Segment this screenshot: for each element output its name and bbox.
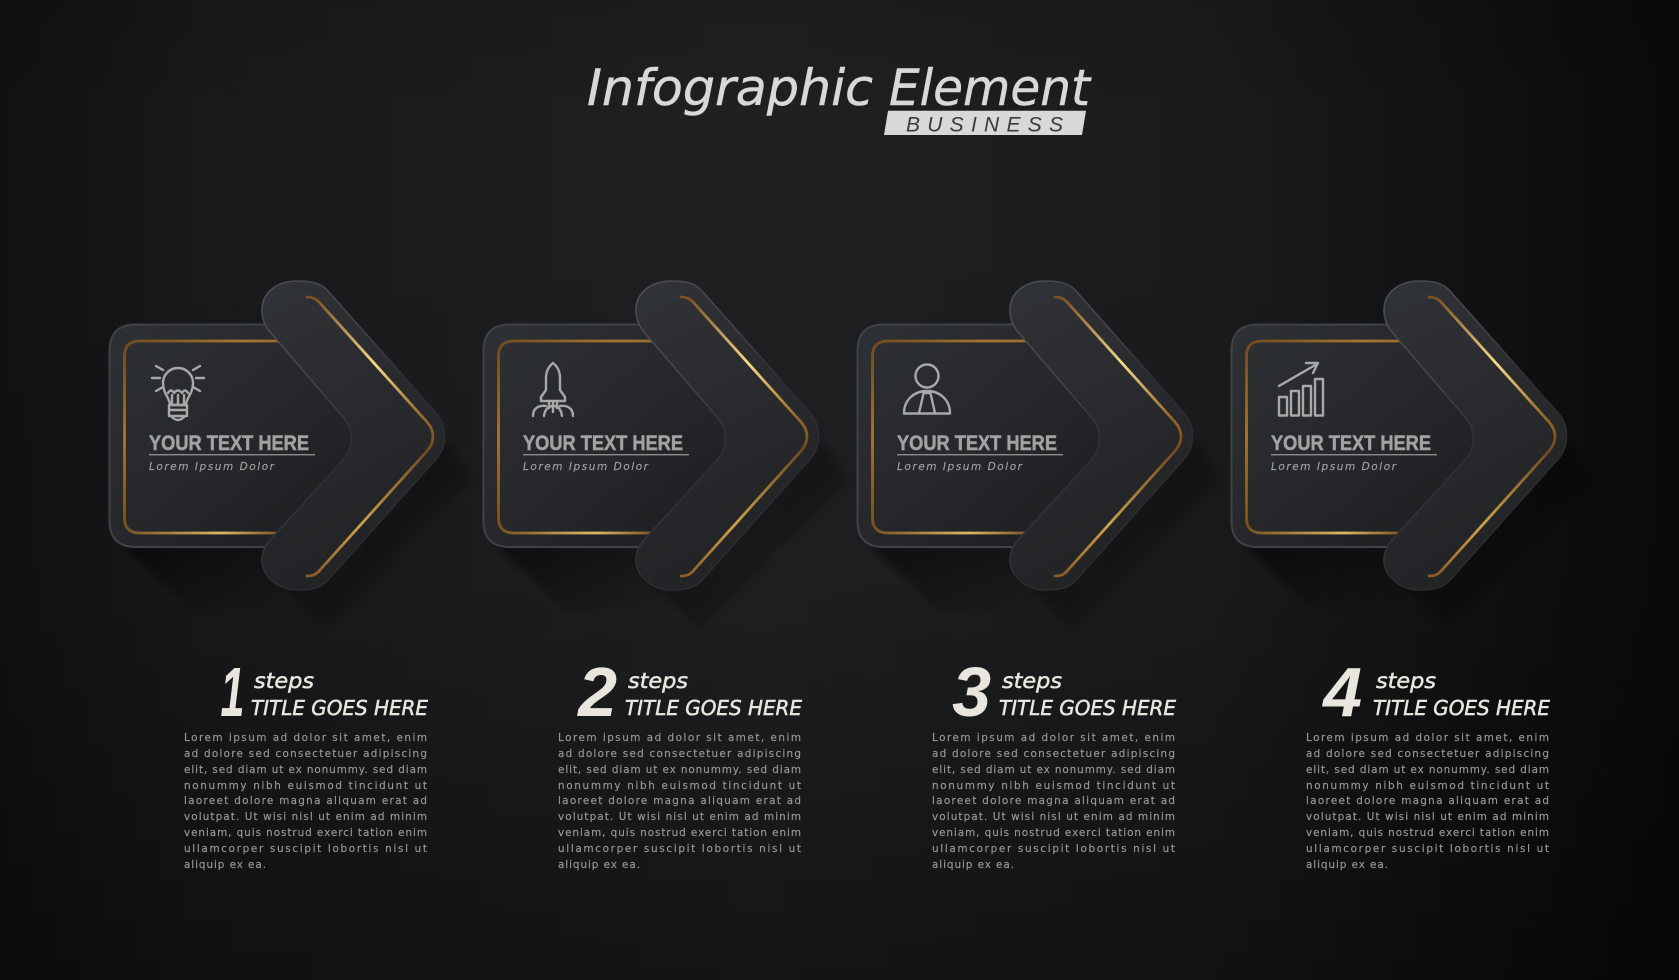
body text: Lorem ipsum ad dolor sit amet, enim: [184, 732, 427, 744]
body text: volutpat. Ut wisi nisl ut enim ad minim: [932, 811, 1175, 823]
body text: nonummy nibh euismod tincidunt ut: [932, 780, 1175, 792]
icon: light bulb: [152, 366, 204, 420]
label subtitle: Lorem Ipsum Dolor: [149, 461, 275, 473]
label rule: [1271, 454, 1437, 455]
steps word: steps: [1376, 669, 1436, 693]
body text: veniam, quis nostrud exerci tation enim: [184, 827, 427, 839]
steps word: steps: [1002, 669, 1062, 693]
body text: veniam, quis nostrud exerci tation enim: [1306, 827, 1549, 839]
step title: TITLE GOES HERE: [625, 696, 802, 720]
step 2: [484, 281, 849, 871]
step 3: [858, 281, 1223, 871]
body text: Lorem ipsum ad dolor sit amet, enim: [932, 732, 1175, 744]
body text: veniam, quis nostrud exerci tation enim: [932, 827, 1175, 839]
gold frame: [124, 341, 285, 533]
shadow: [496, 440, 849, 630]
body text: laoreet dolore magna aliquam erat ad: [932, 795, 1175, 807]
subtitle badge: [884, 111, 1086, 137]
body text: elit, sed diam ut ex nonummy. sed diam: [1306, 764, 1549, 776]
body text: aliquip ex ea.: [1306, 859, 1388, 871]
label rule: [523, 454, 689, 455]
gold chevron: [307, 297, 433, 576]
body text: veniam, quis nostrud exerci tation enim: [558, 827, 801, 839]
title: [587, 59, 1092, 117]
panel base: [110, 324, 360, 547]
title: Element: [889, 59, 1092, 117]
steps word: steps: [628, 669, 688, 693]
body text: ullamcorper suscipit lobortis nisl ut: [184, 843, 427, 855]
body text: ullamcorper suscipit lobortis nisl ut: [1306, 843, 1549, 855]
steps word: steps: [254, 669, 314, 693]
gold chevron: [1429, 297, 1555, 576]
label rule: [897, 454, 1063, 455]
icon: person: [904, 364, 950, 414]
step number: 2: [576, 653, 617, 731]
step title: TITLE GOES HERE: [999, 696, 1176, 720]
body text: elit, sed diam ut ex nonummy. sed diam: [184, 764, 427, 776]
body text: volutpat. Ut wisi nisl ut enim ad minim: [184, 811, 427, 823]
body text: laoreet dolore magna aliquam erat ad: [558, 795, 801, 807]
panel base: [484, 324, 734, 547]
body text: ullamcorper suscipit lobortis nisl ut: [932, 843, 1175, 855]
body text: nonummy nibh euismod tincidunt ut: [558, 780, 801, 792]
body text: [1306, 732, 1549, 871]
body text: nonummy nibh euismod tincidunt ut: [1306, 780, 1549, 792]
body text: [932, 732, 1175, 871]
body text: Lorem ipsum ad dolor sit amet, enim: [1306, 732, 1549, 744]
body text: laoreet dolore magna aliquam erat ad: [184, 795, 427, 807]
chevron: [1010, 281, 1192, 590]
step number: 4: [1321, 653, 1362, 731]
subtitle badge: BUSINESS: [906, 114, 1063, 137]
body text: volutpat. Ut wisi nisl ut enim ad minim: [558, 811, 801, 823]
body text: [184, 732, 427, 871]
body text: [558, 732, 801, 871]
gold frame: [1246, 341, 1407, 533]
step number: 1: [220, 653, 244, 731]
body text: ad dolore sed consectetuer adipiscing: [558, 748, 801, 760]
chevron: [636, 281, 818, 590]
label: YOUR TEXT HERE: [149, 432, 309, 455]
label: YOUR TEXT HERE: [897, 432, 1057, 455]
body text: ad dolore sed consectetuer adipiscing: [184, 748, 427, 760]
body text: elit, sed diam ut ex nonummy. sed diam: [932, 764, 1175, 776]
step 1: [110, 281, 475, 871]
body text: aliquip ex ea.: [184, 859, 266, 871]
icon: growth chart: [1279, 363, 1323, 416]
step 4: [1232, 281, 1597, 871]
label: YOUR TEXT HERE: [1271, 432, 1431, 455]
label subtitle: Lorem Ipsum Dolor: [1271, 461, 1397, 473]
label: YOUR TEXT HERE: [523, 432, 683, 455]
body text: aliquip ex ea.: [932, 859, 1014, 871]
step number: 3: [952, 653, 991, 731]
gold frame: [872, 341, 1033, 533]
gold frame: [498, 341, 659, 533]
body text: Lorem ipsum ad dolor sit amet, enim: [558, 732, 801, 744]
body text: nonummy nibh euismod tincidunt ut: [184, 780, 427, 792]
body text: ad dolore sed consectetuer adipiscing: [1306, 748, 1549, 760]
icon: rocket: [533, 363, 573, 416]
panel base: [858, 324, 1108, 547]
step title: TITLE GOES HERE: [251, 696, 428, 720]
label subtitle: Lorem Ipsum Dolor: [523, 461, 649, 473]
panel base: [1232, 324, 1482, 547]
label rule: [149, 454, 315, 455]
shadow: [122, 440, 475, 630]
title: Infographic: [587, 59, 873, 117]
body text: ullamcorper suscipit lobortis nisl ut: [558, 843, 801, 855]
body text: ad dolore sed consectetuer adipiscing: [932, 748, 1175, 760]
gold chevron: [681, 297, 807, 576]
step title: TITLE GOES HERE: [1373, 696, 1550, 720]
shadow: [1244, 440, 1597, 630]
gold chevron: [1055, 297, 1181, 576]
body text: volutpat. Ut wisi nisl ut enim ad minim: [1306, 811, 1549, 823]
body text: elit, sed diam ut ex nonummy. sed diam: [558, 764, 801, 776]
body text: laoreet dolore magna aliquam erat ad: [1306, 795, 1549, 807]
label subtitle: Lorem Ipsum Dolor: [897, 461, 1023, 473]
chevron: [262, 281, 444, 590]
body text: aliquip ex ea.: [558, 859, 640, 871]
shadow: [870, 440, 1223, 630]
chevron: [1384, 281, 1566, 590]
